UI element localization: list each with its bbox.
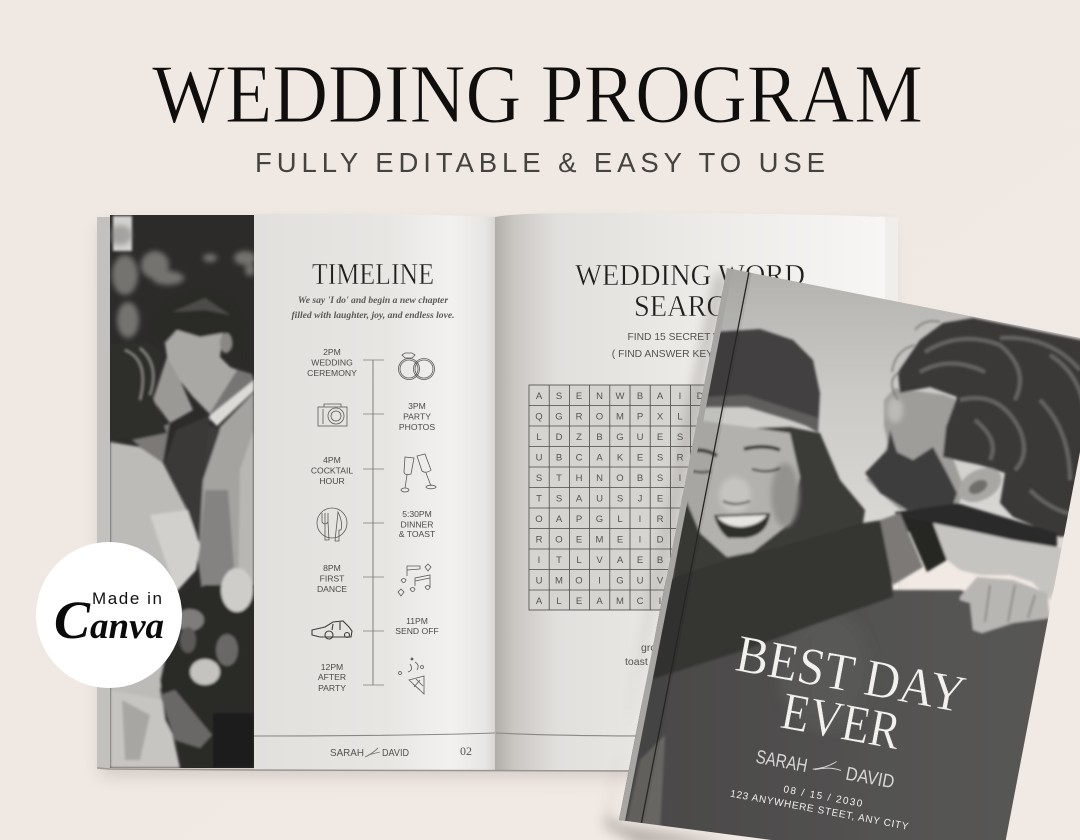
nose shadow: [723, 501, 750, 504]
cuff: [908, 528, 948, 574]
word search grid: E: [576, 596, 582, 607]
word search grid: I: [639, 534, 641, 546]
cover address: 123 ANYWHERE STEET, ANY CITY: [729, 789, 909, 833]
timeline labels: AFTER: [318, 672, 346, 682]
word search grid: X: [657, 412, 664, 422]
word search grid: E: [637, 555, 643, 566]
icon: rings: [398, 353, 434, 380]
timeline labels: 12PM: [321, 662, 343, 672]
word search heading: [575, 257, 805, 323]
word search grid: I: [679, 391, 681, 402]
timeline labels: WEDDING: [311, 358, 353, 368]
word search grid: L: [556, 596, 562, 607]
word search grid: R: [677, 452, 684, 464]
word search grid: A: [617, 555, 624, 566]
groom suit: [198, 392, 254, 570]
cover title and details: [710, 625, 970, 838]
word search grid: U: [536, 576, 543, 586]
dark dress below bouquet: [213, 713, 254, 768]
cover shadow: [604, 272, 735, 840]
subtitle: FULLY EDITABLE & EASY TO USE: [255, 147, 825, 178]
timeline intro text: [291, 295, 455, 321]
man's hair wisps: [892, 321, 940, 400]
right page footer rule: [496, 733, 660, 736]
icon: car: [312, 621, 352, 639]
watch sleeve pattern: [880, 513, 923, 585]
groom neck and collar: [196, 368, 254, 417]
bride's hand: [160, 690, 212, 748]
word search instructions: [612, 332, 768, 360]
hat: [700, 329, 820, 432]
word search grid: D: [697, 391, 704, 402]
man's beard: [865, 430, 957, 510]
icon: champagne glasses: [401, 454, 436, 492]
word search grid: L: [576, 555, 582, 566]
word search grid: O: [616, 473, 624, 484]
word list: kiss: [668, 670, 686, 682]
groom hair: [164, 328, 234, 349]
word search grid: E: [576, 391, 582, 402]
smile: [714, 513, 770, 538]
word search grid: B: [556, 452, 562, 464]
word search grid: S: [556, 391, 562, 402]
word search grid: A: [556, 514, 563, 525]
dark sleeve: [650, 520, 893, 680]
cover spine fold: [688, 270, 752, 534]
word search grid: A: [697, 412, 704, 422]
word search heading: WEDDING WORD: [575, 257, 805, 292]
word search grid: K: [617, 452, 624, 464]
word search grid: D: [556, 432, 563, 443]
word search grid: C: [637, 596, 644, 607]
bouquet: [158, 584, 254, 745]
word search grid: H: [576, 473, 583, 484]
word search grid: M: [596, 534, 604, 546]
icon: music notes: [398, 564, 431, 596]
word search grid: T: [536, 494, 542, 504]
word search grid: D: [657, 534, 664, 546]
word search grid: E: [637, 452, 643, 464]
word search grid: Q: [535, 412, 543, 422]
badge: made in canva: [36, 542, 182, 688]
left page footer: SARAH: [330, 747, 364, 759]
badge: made in canva: Canva: [54, 590, 164, 650]
word list: toast / guest: [625, 656, 682, 668]
word search grid: T: [556, 555, 562, 566]
word search grid: N: [596, 391, 603, 402]
word search grid: B: [637, 391, 643, 402]
word search grid: E: [657, 432, 663, 443]
word search grid: B: [596, 432, 603, 443]
gap shadow between couple: [165, 415, 210, 540]
groom ear: [220, 333, 232, 353]
word search grid: E: [617, 534, 623, 546]
timeline labels: PHOTOS: [399, 422, 435, 432]
word search grid: [529, 385, 751, 610]
timeline labels: 3PM: [408, 401, 426, 411]
word search grid: G: [616, 576, 624, 586]
timeline labels: DANCE: [317, 584, 347, 594]
word search grid: M: [555, 576, 563, 586]
left photo: couple kissing: [108, 215, 256, 768]
bride hair: [110, 342, 167, 440]
word search grid: J: [638, 494, 643, 504]
word search grid: S: [617, 494, 623, 504]
word search grid: Z: [576, 432, 582, 443]
word search grid: S: [657, 452, 663, 464]
timeline labels: 2PM: [323, 347, 341, 357]
word search grid: C: [576, 452, 583, 464]
timeline labels: DINNER: [401, 520, 433, 530]
left page footer: 02: [460, 744, 472, 758]
cover names: SARAH: [754, 747, 809, 777]
word search grid: U: [637, 432, 644, 443]
word search grid: A: [536, 391, 543, 402]
word search grid: A: [576, 494, 583, 504]
word search grid: U: [596, 494, 603, 504]
word search grid: P: [576, 514, 582, 525]
foliage highlights: [113, 216, 132, 251]
left page: [254, 213, 495, 770]
cover title and details: EVER: [777, 682, 906, 761]
word search grid: P: [637, 412, 643, 422]
jacket collar: [894, 502, 1059, 548]
bride dress: [110, 440, 188, 701]
word search grid: T: [556, 473, 562, 484]
word search grid: V: [596, 555, 603, 566]
word search grid: I: [679, 473, 681, 484]
badge: made in canva: Made in: [92, 589, 162, 608]
man's face: [866, 388, 965, 510]
word list: [625, 642, 703, 682]
timeline intro text: filled with laughter, joy, and endless love.: [291, 310, 455, 321]
timeline labels: 11PM: [406, 616, 428, 626]
timeline labels: SEND OFF: [395, 626, 439, 636]
word search grid: E: [576, 534, 582, 546]
word search grid: M: [616, 596, 624, 607]
left page footer: [254, 733, 495, 759]
groom face: [165, 330, 237, 413]
timeline heading: TIMELINE: [312, 256, 434, 291]
woman's face: [683, 420, 800, 557]
timeline axis: [363, 360, 384, 685]
timeline labels: 8PM: [323, 563, 341, 573]
eyebrows and closed eyes: [690, 447, 780, 456]
word search grid: G: [596, 514, 603, 525]
timeline labels: 5:30PM: [402, 509, 432, 519]
word search grid: L: [536, 432, 542, 443]
word search grid: E: [657, 494, 663, 504]
word search grid: S: [556, 494, 562, 504]
word search grid: G: [555, 412, 563, 422]
word search grid: O: [575, 576, 583, 586]
word search grid: R: [536, 534, 543, 546]
word search grid: U: [536, 452, 543, 464]
word search grid: N: [596, 473, 603, 484]
word search grid: I: [538, 555, 540, 566]
word search grid: L: [677, 412, 683, 422]
book bottom edge: [97, 768, 640, 771]
word search grid: I: [639, 514, 641, 525]
word search grid: O: [596, 412, 603, 422]
word search instructions: FIND 15 SECRET WORDS: [627, 332, 753, 343]
timeline labels: CEREMONY: [307, 368, 357, 378]
page edges: [880, 216, 898, 770]
timeline labels: & TOAST: [399, 529, 436, 539]
left page footer: DAVID: [382, 747, 409, 759]
word search grid: O: [555, 534, 563, 546]
timeline labels: 4PM: [323, 455, 341, 465]
word search grid: L: [617, 514, 623, 525]
word search grid: A: [536, 596, 543, 607]
word search grid: A: [596, 596, 603, 607]
tie: [204, 426, 220, 474]
word search grid: T: [697, 432, 703, 443]
timeline labels: [307, 347, 439, 693]
woman's hair: [672, 427, 865, 580]
timeline labels: PARTY: [403, 412, 431, 422]
man's ear: [960, 466, 1002, 504]
timeline intro text: We say 'I do' and begin a new chapter: [298, 295, 448, 306]
icon: plate and cutlery: [317, 508, 347, 541]
spine edge: [97, 217, 111, 768]
timeline labels: HOUR: [319, 476, 345, 486]
timeline labels: PARTY: [318, 683, 346, 693]
open booklet: [97, 213, 898, 771]
word search grid: W: [616, 391, 625, 402]
word search grid: S: [677, 432, 683, 443]
word search grid: U: [637, 576, 644, 586]
word search grid: B: [657, 555, 663, 566]
fingers: [960, 577, 1050, 633]
timeline labels: COCKTAIL: [311, 466, 353, 476]
word search grid: A: [657, 391, 664, 402]
book shadow: [100, 226, 890, 776]
word list: groom / bride: [641, 642, 703, 654]
cover title and details: DAVID: [844, 764, 896, 793]
word search grid: M: [616, 412, 624, 422]
cover title: BEST DAY: [731, 625, 970, 724]
cover date: 08 / 15 / 2030: [782, 784, 864, 810]
icon: party popper: [398, 658, 424, 694]
cover photo: couple embracing: [600, 318, 1080, 840]
title: WEDDING PROGRAM: [152, 48, 923, 141]
icon: camera: [318, 404, 347, 426]
word search grid: I: [659, 596, 661, 607]
word search grid: G: [616, 432, 624, 443]
word search instructions: ( FIND ANSWER KEY ON PAGE ): [612, 349, 768, 360]
word search grid: B: [637, 473, 643, 484]
timeline labels: FIRST: [320, 574, 345, 584]
booklet cover: [600, 260, 1080, 840]
word search grid: R: [576, 412, 583, 422]
word search grid: I: [598, 576, 601, 586]
word search grid: S: [536, 473, 542, 484]
bride neck: [132, 423, 170, 463]
right page: [495, 213, 885, 770]
cover sky: [670, 268, 1080, 560]
man's hair: [898, 318, 1080, 537]
word search heading: SEARCH: [634, 288, 746, 323]
arm: [933, 523, 1062, 600]
bride face: [153, 357, 193, 423]
word search grid: S: [657, 473, 663, 484]
back of jacket: [600, 590, 1080, 840]
word search grid: V: [657, 576, 664, 586]
word search grid: O: [535, 514, 543, 525]
word search grid: A: [596, 452, 603, 464]
word search grid: R: [657, 514, 664, 525]
